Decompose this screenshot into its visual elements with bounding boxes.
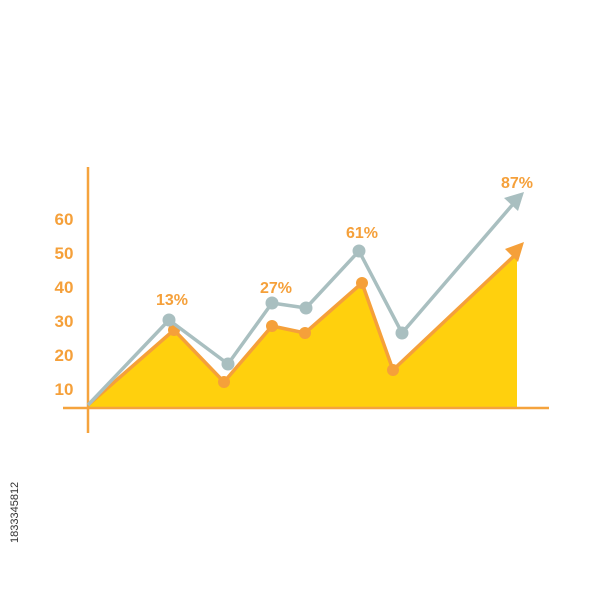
gray line with arrow <box>88 192 524 405</box>
y-axis labels <box>55 210 73 399</box>
percentage labels: 27% <box>260 280 292 297</box>
y-axis labels: 50 <box>55 244 73 263</box>
y-axis labels: 40 <box>55 278 73 297</box>
y-axis labels: 10 <box>55 380 73 399</box>
y-axis labels: 30 <box>55 312 73 331</box>
y-axis labels: 20 <box>55 346 73 365</box>
y-axis labels: 60 <box>55 210 73 229</box>
area: yellow fill <box>88 255 517 408</box>
percentage labels: 61% <box>346 225 378 242</box>
percentage labels: 87% <box>501 175 533 192</box>
orange line with arrow <box>88 242 524 405</box>
axes <box>63 167 549 433</box>
stock id: 1833345812 <box>9 482 21 543</box>
percentage labels <box>156 175 533 309</box>
percentage labels: 13% <box>156 292 188 309</box>
